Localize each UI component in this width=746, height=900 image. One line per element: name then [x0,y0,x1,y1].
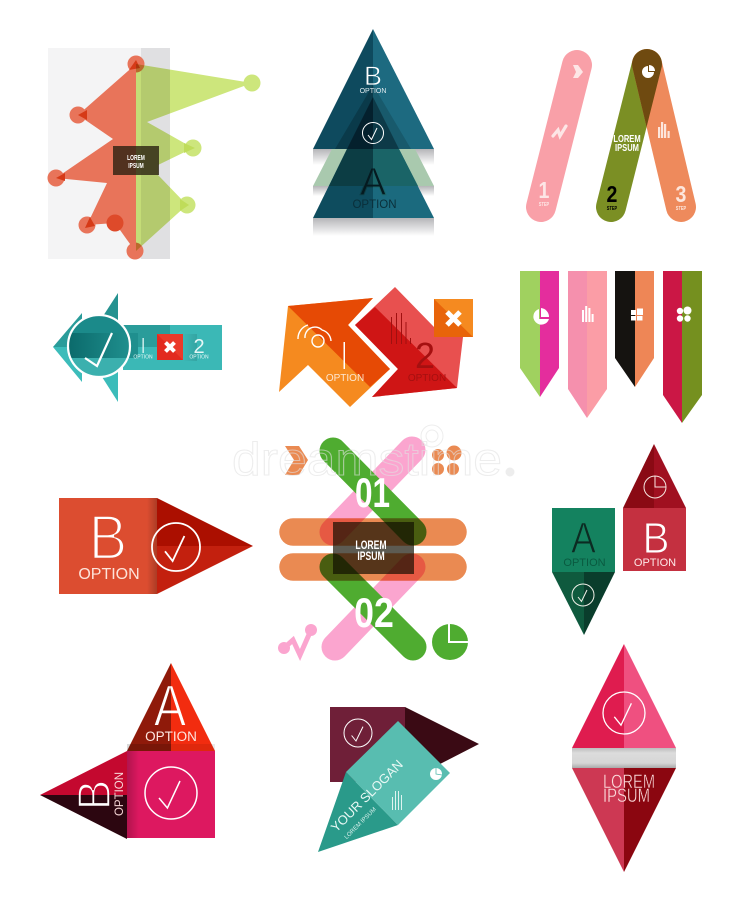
tag B [623,444,686,571]
small arrow [53,313,82,382]
teal square: YOUR SLOGAN [328,757,406,835]
icon: bars [391,313,411,344]
tag A: OPTION [563,557,606,569]
check circle [68,315,130,378]
maroon square [330,707,479,782]
red chevron [355,287,463,397]
red x button [157,334,197,361]
triangle B: B [364,61,382,91]
label box: LOREM [127,155,145,162]
orange chevron [279,298,390,407]
shadows [313,149,434,236]
panel: A B green red tags [552,444,686,635]
triangle B: OPTION [114,772,126,816]
icon: chevron [285,446,308,475]
panel: A B red pink house [40,663,215,839]
triangle A: A [154,675,187,739]
pill 1: STEP [539,202,549,207]
lower triangle: IPSUM [603,786,650,807]
pill 2 [607,64,647,211]
middle pale triangle [313,149,434,186]
triangle B [40,751,127,839]
label box [113,146,159,175]
panel: radial arrow diagram [48,48,260,260]
option 2: OPTION [189,354,209,360]
triangle A [313,149,434,218]
square [127,751,215,838]
tag B: B [642,513,670,562]
tag A: A [571,513,597,563]
icon: bars [658,122,670,138]
icon: check [152,523,200,571]
triangle A: OPTION [352,199,397,211]
label box [333,522,414,574]
panel: orange red chevrons [279,287,473,407]
panel: three step pills [539,64,687,211]
panel: B option red arrow: OPTION [78,566,140,583]
panel: four ribbons [520,271,702,423]
orange bars [293,532,453,567]
triangle B: OPTION [360,88,386,95]
grey band [572,748,676,768]
triangle A [127,663,215,751]
pill 3: 3 [676,182,687,207]
lower triangle: LOREM [603,772,655,793]
tag A [552,508,615,635]
panel: crossing pills: 02 [354,590,394,637]
triangle A: A [360,161,386,204]
pill 2: IPSUM [615,142,639,153]
panel: teal arrow banner [53,293,222,402]
icon: pie [642,65,655,78]
orange x button [434,299,473,337]
orange chevron: OPTION [326,373,364,384]
panel: crossing pills [232,425,514,660]
option 1 [133,338,153,360]
panel: diamond [572,644,676,872]
background panels [48,48,170,259]
pill 2: STEP [607,206,617,211]
panel: B option red arrow: B [89,502,127,573]
pill 3: STEP [676,206,686,211]
ribbon 2 [568,271,607,418]
triangle B [313,29,434,149]
panel: teal triangles A B [313,29,434,236]
icon: check [362,122,384,144]
green half with nodes [136,64,260,251]
icon: pie [432,624,468,660]
option 1: OPTION [133,354,153,360]
icon: zigzag [278,624,317,655]
pill 1 [539,65,583,207]
red chevron: OPTION [408,373,446,384]
crossing pills [333,450,413,647]
lower triangle [572,768,676,872]
panel: crossing pills: 01 [355,469,390,516]
pill 1: 1 [539,178,550,203]
label box: IPSUM [128,163,144,170]
triangle A: OPTION [145,729,197,744]
option 2: 2 [193,336,205,358]
coral half with nodes [48,56,144,260]
watermark: dreamstime [232,433,502,485]
panel: your slogan [318,707,479,852]
panel: B option red arrow [59,498,253,594]
ribbon 1 [520,271,559,397]
big arrow [83,293,127,402]
teal square [318,721,450,852]
pill 2: 2 [607,182,617,207]
icon: dots [432,446,462,475]
option 2 [189,336,209,360]
label box: IPSUM [357,551,385,563]
tag B: OPTION [634,557,676,569]
icon: pie [430,768,442,780]
ribbon 3 [615,271,654,387]
pill 2: LOREM [613,133,641,144]
teal square: LOREM IPSUM [344,807,378,841]
arrow head [157,498,253,594]
icon: signal [298,325,331,347]
pill 3 [642,64,687,211]
upper triangle [572,644,676,748]
label box: LOREM [355,540,387,552]
square [59,498,157,594]
triangle B: B [68,780,120,810]
banner [123,325,222,370]
ribbon 4 [663,271,702,423]
red chevron: 2 [415,335,435,376]
